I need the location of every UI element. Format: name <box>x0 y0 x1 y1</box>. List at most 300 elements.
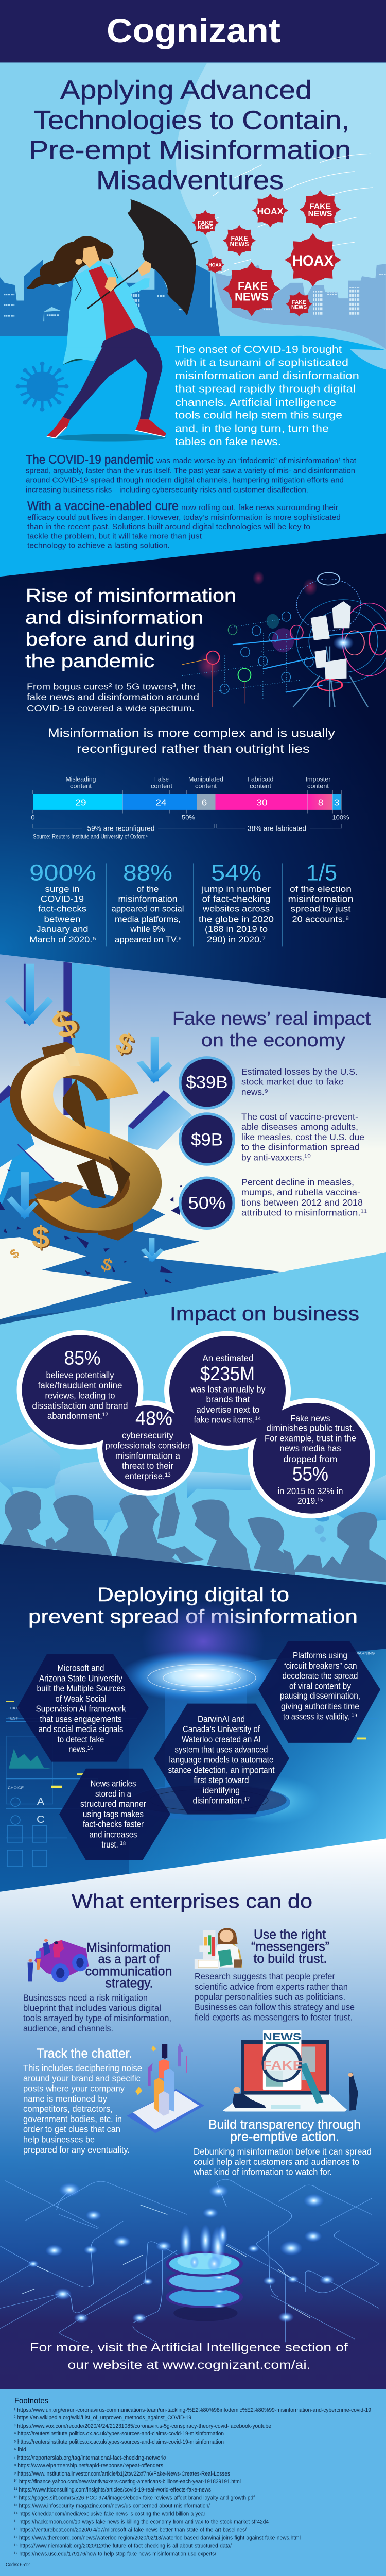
stat: 54%: of fact-checking <box>202 894 271 904</box>
text: track the chatter: prepared for any eventuality. <box>23 2144 130 2155</box>
bubble: public trust: diminishes public trust. <box>267 1422 355 1433</box>
call to action <box>30 2341 348 2372</box>
title: Applying Advanced <box>60 76 312 105</box>
fake news virus icons: FAKE <box>198 220 213 226</box>
fake news virus icons: NEWS <box>235 290 269 303</box>
text block: vaccine-enabled cure: efficacy could put lives in danger. However, today’s misinformation is more sophisticated <box>27 513 341 522</box>
heading: build transparency: Build transparency through <box>208 2117 361 2132</box>
hexagon: Microsoft and ASU: Supervision AI framework <box>36 1703 126 1714</box>
illustration: holographic HUD: A <box>37 1795 45 1807</box>
hexagon: circuit breakers: pausing dissemination, <box>280 1690 360 1701</box>
hexagon: circuit breakers: giving authorities time <box>281 1701 359 1711</box>
icon: laptop with fake news magnifier: NEWS <box>263 2031 302 2042</box>
hexagon: DarwinAI: stance detection, an important <box>168 1765 274 1775</box>
text: stock market losses <box>241 1066 358 1097</box>
title: Technologies to Contain, <box>33 106 349 135</box>
footnote list: ¹⁷ https://www.therecord.com/news/waterloo-region/2020/02/13/waterloo-based-darwinai-joins-fight-against-fake-news.html <box>14 2535 301 2541</box>
footnote list: ¹⁰ https://finance.yahoo.com/news/antivaxxers-costing-americans-billions-each-year-191839191.html <box>14 2479 241 2485</box>
text: build transparency <box>193 2146 372 2177</box>
hexagon: DarwinAI: identifying <box>203 1785 240 1795</box>
section heading <box>172 1008 371 1050</box>
bubble: 48%: professionals consider <box>106 1440 190 1450</box>
bubble: public trust <box>265 1413 356 1506</box>
woman with umbrella <box>27 199 198 442</box>
bubble: 48%: misinformation a <box>115 1450 181 1461</box>
heading: build transparency: pre-emptive action. <box>230 2129 339 2144</box>
stat: 900%: fact-checks <box>38 904 86 913</box>
heading: misinformation strategy: as a part of <box>98 1952 160 1967</box>
stat: 88%: while 9% <box>130 924 165 934</box>
text: vaccination decline: attributed to misinformation.¹¹ <box>241 1207 367 1218</box>
stacked bar chart: Imposter <box>306 776 331 783</box>
fake news virus icons <box>192 190 341 317</box>
stat: 54%: websites across <box>202 904 270 913</box>
icon: small dollar signs: $ <box>33 1221 50 1255</box>
panel: impact on business <box>0 1252 386 1585</box>
footnote list: ¹⁹ https://news.usc.edu/179176/how-to-help-stop-fake-news-misinformation-usc-experts/ <box>14 2551 217 2557</box>
footnote list: ¹² https://pages.sift.com/rs/526-PCC-974/images/ebook-fake-reviews-affect-brand-loyalty-and-growth.pdf <box>14 2495 255 2501</box>
bubble: $235M: fake news items.¹⁴ <box>194 1414 261 1425</box>
stacked bar chart: 59% are reconfigured <box>87 825 155 833</box>
stacked bar chart: 30 <box>256 797 268 807</box>
text block: vaccine-enabled cure <box>27 499 341 550</box>
section heading <box>25 585 236 671</box>
stat: 88% <box>112 860 184 944</box>
hexagon: circuit breakers: of viral content by <box>289 1681 352 1691</box>
stacked bar chart: 50% <box>182 814 195 821</box>
stat: 900%: January and <box>36 924 89 934</box>
stacked bar chart: 29 <box>75 797 86 807</box>
stat circle: 50% <box>179 1177 235 1230</box>
bubble: public trust: news media has <box>280 1443 341 1453</box>
hexagon: Microsoft and ASU: of Weak Social <box>56 1693 107 1704</box>
stat: 88%: appeared on TV.⁶ <box>115 934 182 944</box>
stacked bar chart <box>31 776 349 840</box>
bubble: 85%: reviews, leading to <box>45 1390 115 1400</box>
call to action: our website at www.cognizant.com/ai. <box>68 2359 311 2372</box>
illustration: holographic HUD: DATA <box>10 1706 21 1710</box>
stacked bar chart: Manipulated <box>188 776 223 783</box>
hexagon: news articles: using tags makes <box>83 1808 144 1819</box>
hexagon: news articles: structured manner <box>80 1799 146 1809</box>
bubble: $235M: $235M <box>200 1363 255 1385</box>
illustration: holographic HUD: TEST <box>8 1716 19 1721</box>
text: vaccination decline: Percent decline in measles, <box>241 1177 354 1187</box>
stacked bar chart: 24 <box>155 797 167 807</box>
stat: 900%: 900% <box>29 860 96 886</box>
fake news virus icons: NEWS <box>198 225 213 230</box>
text: build transparency: what kind of information to watch for. <box>193 2166 332 2177</box>
fake news virus icons: HOAX <box>257 206 284 216</box>
stat circle: $9B <box>179 1112 235 1166</box>
illustration: holographic HUD: C <box>37 1814 45 1825</box>
stacked bar chart: content <box>151 783 172 789</box>
text: research <box>195 1971 355 2022</box>
heading: What enterprises can do <box>72 1891 312 1912</box>
hexagon: DarwinAI: Canada’s University of <box>183 1724 260 1734</box>
text: stock market losses: stock market due to fake <box>241 1076 344 1087</box>
intro paragraph: and, in the long turn, turn the <box>175 422 329 435</box>
text: vaccine cost <box>241 1111 364 1162</box>
panel: what enterprises can do <box>0 1838 386 2389</box>
stacked bar chart: Fabricatd <box>247 776 273 783</box>
stat circle: $39B: $39B <box>186 1073 228 1092</box>
stacked bar chart: content <box>195 783 217 789</box>
hexagon: circuit breakers: to assess its validity. ¹⁹ <box>283 1711 357 1722</box>
stacked bar chart: content <box>307 783 329 789</box>
icon: small dollar signs: $ <box>32 1221 49 1254</box>
subtext: COVID-19 covered a wide spectrum. <box>27 703 195 714</box>
text block: vaccine-enabled cure: technology to achieve a lasting solution. <box>27 541 170 550</box>
intro paragraph: with it a tsunami of sophisticated <box>174 357 348 369</box>
stat: 900%: surge in <box>45 884 79 894</box>
bubble: 48%: cybersecurity <box>122 1430 174 1440</box>
text: track the chatter: name is mentioned by <box>23 2093 108 2104</box>
hexagon: DarwinAI: language models to automate <box>169 1754 274 1765</box>
stat: 900%: March of 2020.⁵ <box>29 934 96 944</box>
icon: laptop with fake news magnifier <box>223 2030 358 2112</box>
text block: COVID-19 pandemic: was made worse by an “infodemic” of misinformation¹ that <box>156 456 357 465</box>
bubble: $235M: An estimated <box>202 1353 253 1363</box>
icon: phone bar chart <box>127 2043 204 2133</box>
stat: 88%: of the <box>137 884 159 894</box>
stat: 900%: COVID-19 <box>41 894 84 904</box>
heading: right messengers: “messengers” <box>251 1939 329 1954</box>
hexagon: news articles: fact-checks faster <box>83 1819 144 1829</box>
hexagon: Microsoft and ASU: that uses engagements <box>40 1714 122 1724</box>
heading: track the chatter: Track the chatter. <box>37 2046 132 2061</box>
intro paragraph: that spread rapidly through digital <box>175 383 356 395</box>
icon: small dollar signs: $ <box>7 1246 22 1261</box>
chart heading: Misinformation is more complex and is usually <box>48 726 336 740</box>
footnote list: ¹⁶ https://venturebeat.com/2020/0 4/07/microsoft-ai-fake-news-better-than-state-of-the-art-baselines/ <box>14 2527 247 2533</box>
stacked bar chart: 6 <box>202 797 207 807</box>
bubble: 85% <box>32 1348 128 1421</box>
footnote list: ⁶ ibid <box>14 2446 26 2453</box>
text: track the chatter: order to get clues that can <box>23 2124 120 2134</box>
heading: Deploying digital to <box>97 1584 289 1606</box>
icon: data cylinder <box>167 2224 241 2321</box>
bubble: 85%: fake/fraudulent online <box>38 1380 122 1391</box>
panel: deploying digital <box>0 1544 386 1892</box>
subtext: From bogus cures² to 5G towers³, the <box>27 681 196 691</box>
bubble: 48%: 48% <box>135 1408 172 1429</box>
stat: 1/5: of the election <box>290 884 352 894</box>
text block: COVID-19 pandemic: increasing business risks—including cybersecurity risks and customer disaffection. <box>26 486 308 494</box>
text: vaccine cost: like measles, cost the U.S. due <box>241 1131 364 1142</box>
hexagon: news articles: and increases <box>90 1829 137 1839</box>
hexagon: DarwinAI: system that uses advanced <box>175 1744 268 1755</box>
intro paragraph: The onset of COVID-19 brought <box>175 344 342 355</box>
stat: 54%: 54% <box>211 860 261 886</box>
section heading: Rise of misinformation <box>26 585 236 606</box>
heading: misinformation strategy: Misinformation <box>86 1940 171 1955</box>
codex label: Codex 6512 <box>6 2562 30 2568</box>
stat circle: $9B: $9B <box>191 1130 223 1149</box>
bubble: 85%: dissatisfaction and brand <box>32 1400 128 1411</box>
panel: hero <box>0 0 386 577</box>
stat: 88%: misinformation <box>118 894 178 904</box>
section heading: and disinformation <box>25 607 203 628</box>
text: vaccine cost: able diseases among adults, <box>241 1122 358 1132</box>
text: track the chatter: competitors, detractors, <box>23 2104 113 2114</box>
section heading: the pandemic <box>25 651 154 671</box>
bubble: $235M <box>190 1353 266 1425</box>
icon: small dollar signs: $ <box>112 1026 138 1061</box>
footnote list: ⁷ https://reporterslab.org/tag/international-fact-checking-network/ <box>14 2454 167 2461</box>
fake news virus icons: FAKE <box>309 202 331 211</box>
hexagon: DarwinAI: Waterloo created an AI <box>182 1734 261 1744</box>
text: track the chatter: posts where your company <box>23 2083 125 2094</box>
section heading: Fake news’ real impact <box>172 1008 371 1029</box>
title: Misadventures <box>96 166 284 195</box>
hexagon: circuit breakers: Platforms using <box>293 1650 347 1660</box>
stat: 1/5: spread by just <box>290 904 351 913</box>
hexagon: news articles: stored in a <box>95 1788 132 1799</box>
icon: small dollar signs <box>7 1000 140 1276</box>
text block: COVID-19 pandemic <box>26 453 357 494</box>
text: risk mitigation: blueprint that includes various digital <box>23 2003 161 2013</box>
fake news virus icons: FAKE <box>238 280 268 293</box>
footnote list: ³ https://www.vox.com/recode/2020/4/24/21231085/coronavirus-5g-conspiracy-theory-covid-facebook-youtube <box>14 2422 271 2429</box>
footnote list: ⁸ https://www.eipartnership.net/rapid-response/repeat-offenders <box>14 2462 163 2469</box>
bubble: public trust: dropped from <box>284 1453 338 1464</box>
stacked bar chart: 3 <box>334 797 339 807</box>
text: stock market losses: Estimated losses by the U.S. <box>241 1066 358 1077</box>
hexagon: Microsoft and ASU: to detect fake <box>58 1734 104 1744</box>
bubble: public trust: 2019.¹⁵ <box>297 1495 323 1506</box>
footnote list <box>14 2406 371 2557</box>
text: track the chatter: This includes deciphering noise <box>23 2063 142 2073</box>
panel: economy impact <box>0 954 386 1325</box>
wind streaks <box>212 154 373 273</box>
stat: 88%: 88% <box>123 860 172 886</box>
hexagon: Microsoft and ASU: Arizona State University <box>39 1673 123 1683</box>
hexagon: Microsoft and ASU: built the Multiple Sources <box>37 1683 125 1693</box>
text block: COVID-19 pandemic: spread, arguably, faster than the virus itself. The past year saw a variety of mis- and disinformation <box>26 467 355 476</box>
hexagon: DarwinAI: disinformation.¹⁷ <box>192 1795 250 1805</box>
call to action: For more, visit the Artificial Intelligence section of <box>30 2341 348 2354</box>
stacked bar chart: Misleading <box>66 776 96 783</box>
bubble: public trust: Fake news <box>291 1413 330 1423</box>
stat: 1/5: 20 accounts.⁸ <box>292 914 349 924</box>
subtext <box>27 681 199 714</box>
hexagon: circuit breakers: decelerate the spread <box>282 1670 358 1681</box>
panel: rise of misinformation <box>0 533 386 998</box>
heading: misinformation strategy <box>85 1940 172 1990</box>
icon: small dollar signs: $ <box>45 1001 84 1047</box>
illustration: holographic HUD: WARNING <box>355 1651 375 1656</box>
footnote list: ² https://en.wikipedia.org/wiki/List_of_unproven_methods_against_COVID-19 <box>14 2414 191 2421</box>
text block: vaccine-enabled cure: than in the recent past. Solutions built around digital technologies will be key to <box>27 522 310 531</box>
illustration: holographic HUD: CHOICE <box>8 1786 24 1790</box>
heading: right messengers <box>251 1927 329 1966</box>
stat: 54%: jump in number <box>201 884 271 894</box>
heading: misinformation strategy: communication <box>85 1963 172 1979</box>
bubble: public trust: 55% <box>292 1464 328 1485</box>
footnotes heading: Footnotes <box>14 2396 48 2405</box>
fake news virus icons: NEWS <box>230 241 249 248</box>
hexagon: DarwinAI: first step toward <box>194 1775 249 1785</box>
stat: 88%: appeared on social <box>112 904 184 913</box>
title <box>29 76 351 195</box>
hexagon: Microsoft and ASU: news.¹⁶ <box>69 1743 93 1754</box>
stat: 1/5: 1/5 <box>306 860 337 886</box>
stat: 1/5: misinformation <box>288 894 353 904</box>
stat: 900%: between <box>44 914 81 924</box>
text: track the chatter <box>23 2063 142 2155</box>
subtext: fake news and disinformation around <box>27 692 199 702</box>
hexagon: Microsoft and ASU <box>17 1654 149 1762</box>
hexagon: news articles <box>59 1769 170 1860</box>
text: risk mitigation <box>23 1992 171 2033</box>
footnote list: ¹³ https://www.infosecurity-magazine.com/news/us-concerned-about-misinformation/ <box>14 2503 210 2509</box>
text: track the chatter: around your brand and specific <box>23 2073 141 2083</box>
text: build transparency: could help alert customers and audiences to <box>194 2156 359 2167</box>
heading: Impact on business <box>170 1303 359 1325</box>
heading: build transparency <box>208 2117 361 2144</box>
panel: footnotes <box>0 2389 386 2576</box>
title: Pre-empt Misinformation <box>29 136 351 165</box>
section heading: on the economy <box>201 1030 346 1050</box>
heading: right messengers: to build trust. <box>253 1951 327 1966</box>
text: risk mitigation: tools arrayed by type of misinformation, <box>23 2013 171 2023</box>
fake news virus icons: NEWS <box>291 304 307 310</box>
text: vaccination decline: mumps, and rubella vaccina- <box>241 1187 360 1197</box>
text block: vaccine-enabled cure: With a vaccine-enabled cure <box>27 499 179 513</box>
hexagon: circuit breakers: “circuit breakers” can <box>284 1660 357 1671</box>
stacked bar chart: 0 <box>31 814 35 821</box>
hexagon: Microsoft and ASU: and social media signals <box>38 1724 124 1734</box>
icon: small dollar signs: $ <box>98 1254 115 1276</box>
text: vaccine cost: by anti-vaxxers.¹⁰ <box>241 1152 311 1162</box>
fake news virus icons: FAKE <box>292 299 306 306</box>
text: vaccine cost: The cost of vaccine-prevent- <box>241 1111 358 1122</box>
footnote list: ¹⁵ https://hackernoon.com/10-ways-fake-news-is-killing-the-economy-from-anti-vax-to-the-stock-market-sfr42d4 <box>14 2519 269 2525</box>
icon: laptop with fake news magnifier: FAKE <box>262 2059 303 2073</box>
bubble: 85%: 85% <box>64 1348 101 1369</box>
bubble: $235M: brands that <box>206 1394 250 1404</box>
hexagon: DarwinAI: DarwinAI and <box>198 1714 245 1724</box>
header bar <box>0 0 386 62</box>
footnote list: ⁵ https://reutersinstitute.politics.ox.ac.uk/types-sources-and-claims-covid-19-misinformation <box>14 2438 224 2445</box>
text block: COVID-19 pandemic: around COVID-19 spread through modern digital channels, hampering mitigation efforts and <box>26 476 344 484</box>
stat: 54% <box>199 860 274 944</box>
text: research: Research suggests that people prefer <box>195 1971 335 1981</box>
fake news virus icons: NEWS <box>308 209 332 218</box>
stat: 54%: the globe in 2020 <box>199 914 274 924</box>
fake news virus icons: HOAX <box>209 263 222 268</box>
bubble: public trust: For example, trust in the <box>265 1433 356 1443</box>
section heading: before and during <box>26 629 195 650</box>
stacked bar chart: content <box>70 783 92 789</box>
bubble: 85%: believe potentially <box>46 1370 114 1380</box>
bubble: $235M: advertise next to <box>197 1404 260 1415</box>
footnote list: ¹¹ https://www.fticonsulting.com/insights/articles/covid-19-real-world-effects-fake-news <box>14 2487 211 2493</box>
stat: 1/5 <box>288 860 353 924</box>
intro paragraph: misinformation and disinformation <box>175 370 359 382</box>
illustration: falling dollar and crack <box>0 962 282 1325</box>
icon: virus <box>16 362 68 411</box>
intro paragraph: tools could help stem this surge <box>175 409 342 421</box>
bubble cluster <box>16 1330 375 1518</box>
chart heading <box>48 726 336 756</box>
bubble: 48%: threat to their <box>122 1461 173 1471</box>
bubble: public trust: in 2015 to 32% in <box>278 1486 343 1496</box>
text block: vaccine-enabled cure: now rolling out, fake news surrounding their <box>181 504 338 512</box>
icon: big dollar sign <box>27 1042 146 1241</box>
intro paragraph <box>174 344 359 448</box>
illustration: glowing circuit and data cylinder <box>0 2179 379 2342</box>
text: risk mitigation: Businesses need a risk mitigation <box>23 1992 148 2003</box>
text: stock market losses: news.⁹ <box>241 1087 268 1097</box>
stacked bar chart: False <box>154 776 169 783</box>
text: track the chatter: government bodies, etc. in <box>23 2113 122 2124</box>
text: risk mitigation: audience, and channels. <box>23 2023 113 2033</box>
stacked bar chart: 100% <box>332 814 349 821</box>
stat: 54%: 290) in 2020.⁷ <box>207 934 266 944</box>
text: track the chatter: help businesses be <box>23 2134 95 2144</box>
icon: small dollar signs: $ <box>113 1027 139 1062</box>
stat circle: 50%: 50% <box>188 1194 226 1213</box>
icon: scientist <box>195 1928 242 1969</box>
bright lower band <box>0 336 386 577</box>
text: vaccination decline: tions between 2012 and 2018 <box>241 1197 363 1208</box>
chart heading: reconfigured rather than outright lies <box>77 742 310 756</box>
heading: right messengers: Use the right <box>254 1927 326 1942</box>
footnote list: ⁴ https://reutersinstitute.politics.ox.ac.uk/types-sources-and-claims-covid-19-misinformation <box>14 2430 224 2437</box>
heading: prevent spread of misinformation <box>28 1606 358 1628</box>
hexagon: circuit breakers <box>258 1641 380 1743</box>
text: vaccine cost: to the disinformation spread <box>241 1142 360 1153</box>
heading <box>28 1584 358 1628</box>
bubble: 48%: enterprise.¹³ <box>125 1470 171 1481</box>
text: research: field experts as messengers to foster trust. <box>195 2012 353 2022</box>
stacked bar chart: content <box>250 783 271 789</box>
illustration: 5G tower network <box>182 571 386 707</box>
fake news virus icons: FAKE <box>231 234 248 242</box>
icon: down arrows <box>5 964 172 1262</box>
text: research: scientific advice from experts rather than <box>195 1981 348 1992</box>
illustration: holographic HUD <box>6 1600 378 1867</box>
hexagon: Microsoft and ASU: Microsoft and <box>58 1663 104 1673</box>
stacked bar chart: 38% are fabricated <box>248 825 306 833</box>
icon: small dollar signs: $ <box>47 1001 87 1047</box>
stat: 54%: (188 in 2019 to <box>205 924 268 934</box>
footnote list: ¹⁸ https://www.niemanlab.org/2020/12/the-future-of-fact-checking-is-all-about-structured-data/ <box>14 2543 232 2549</box>
text: research: Businesses can follow this strategy and use <box>195 2002 355 2012</box>
footnote list: ⁹ https://www.institutionalinvestor.com/article/b1j2ttw22xf7n6/Fake-News-Creates-Real-Losses <box>14 2470 230 2477</box>
stat: 88%: media platforms, <box>115 914 181 924</box>
text: vaccination decline <box>241 1177 367 1218</box>
fake news virus icons: HOAX <box>292 253 334 269</box>
intro paragraph: channels. Artificial intelligence <box>175 396 336 409</box>
bubble: 48% <box>106 1408 190 1481</box>
stat: 900% <box>29 860 96 944</box>
hexagon: news articles: trust. ¹⁸ <box>102 1839 126 1850</box>
text block: COVID-19 pandemic: The COVID-19 pandemic <box>26 453 154 467</box>
stat circle: $39B <box>179 1056 235 1110</box>
stat row <box>29 860 354 946</box>
logo: Cognizant <box>107 12 280 49</box>
hexagon: DarwinAI <box>154 1704 289 1814</box>
hexagon: news articles: News articles <box>91 1778 136 1788</box>
heading: misinformation strategy: strategy. <box>106 1975 153 1990</box>
icon: binoculars and people <box>28 1939 89 1982</box>
text block: vaccine-enabled cure: tackle the problem, but it will take more than just <box>27 532 202 541</box>
speech bubbles and silhouettes <box>0 1432 386 1582</box>
stacked bar chart: 8 <box>318 797 323 807</box>
